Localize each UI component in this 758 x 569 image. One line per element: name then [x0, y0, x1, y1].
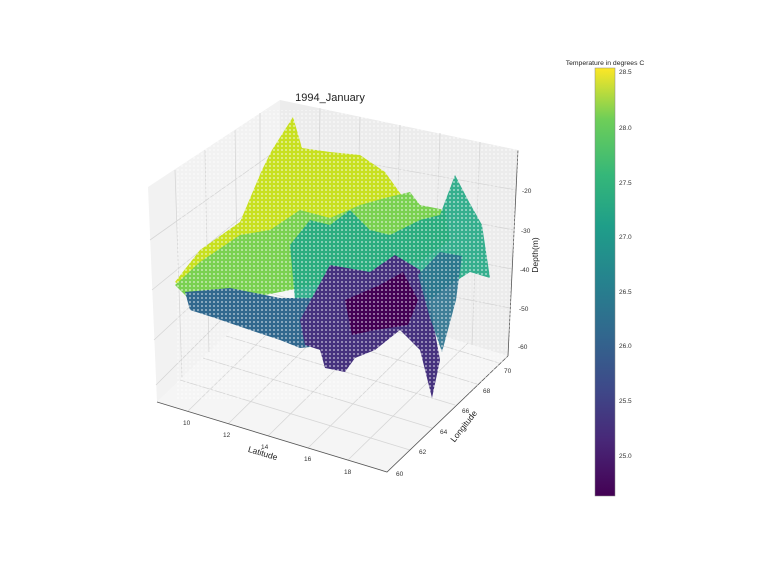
- longitude ticks: 62: [419, 449, 427, 456]
- scatter point cloud: [175, 110, 520, 400]
- colorbar: 27.0: [619, 234, 632, 241]
- longitude ticks: 70: [504, 368, 512, 375]
- depth axis ticks: -50: [519, 306, 529, 313]
- colorbar: 26.5: [619, 289, 632, 296]
- longitude ticks: 64: [440, 429, 448, 436]
- colorbar: 28.0: [619, 125, 632, 132]
- 3d axes panes: [148, 100, 518, 472]
- longitude ticks: 60: [396, 471, 404, 478]
- depth axis ticks: -40: [520, 267, 530, 274]
- depth axis ticks: -20: [522, 188, 532, 195]
- depth axis ticks: [518, 188, 532, 351]
- colorbar: Temperature in degrees C: [566, 60, 644, 67]
- colorbar: [566, 60, 644, 496]
- depth axis ticks: -60: [518, 344, 528, 351]
- longitude ticks: 66: [462, 408, 470, 415]
- depth axis ticks: -30: [521, 228, 531, 235]
- depth label: Depth(m): [530, 237, 540, 273]
- latitude label: Latitude: [247, 444, 279, 462]
- colorbar: 27.5: [619, 180, 632, 187]
- latitude ticks: 18: [344, 469, 352, 476]
- longitude label: Longitude: [448, 408, 479, 444]
- latitude ticks: 14: [261, 444, 269, 451]
- latitude ticks: 12: [223, 432, 231, 439]
- latitude ticks: 10: [183, 420, 191, 427]
- colorbar: 25.0: [619, 453, 632, 460]
- colorbar: 28.5: [619, 69, 632, 76]
- longitude ticks: [396, 368, 512, 478]
- colorbar: 25.5: [619, 398, 632, 405]
- longitude ticks: 68: [483, 388, 491, 395]
- colorbar: 26.0: [619, 343, 632, 350]
- title: 1994_January: [295, 92, 365, 104]
- latitude ticks: [183, 420, 352, 476]
- latitude ticks: 16: [304, 456, 312, 463]
